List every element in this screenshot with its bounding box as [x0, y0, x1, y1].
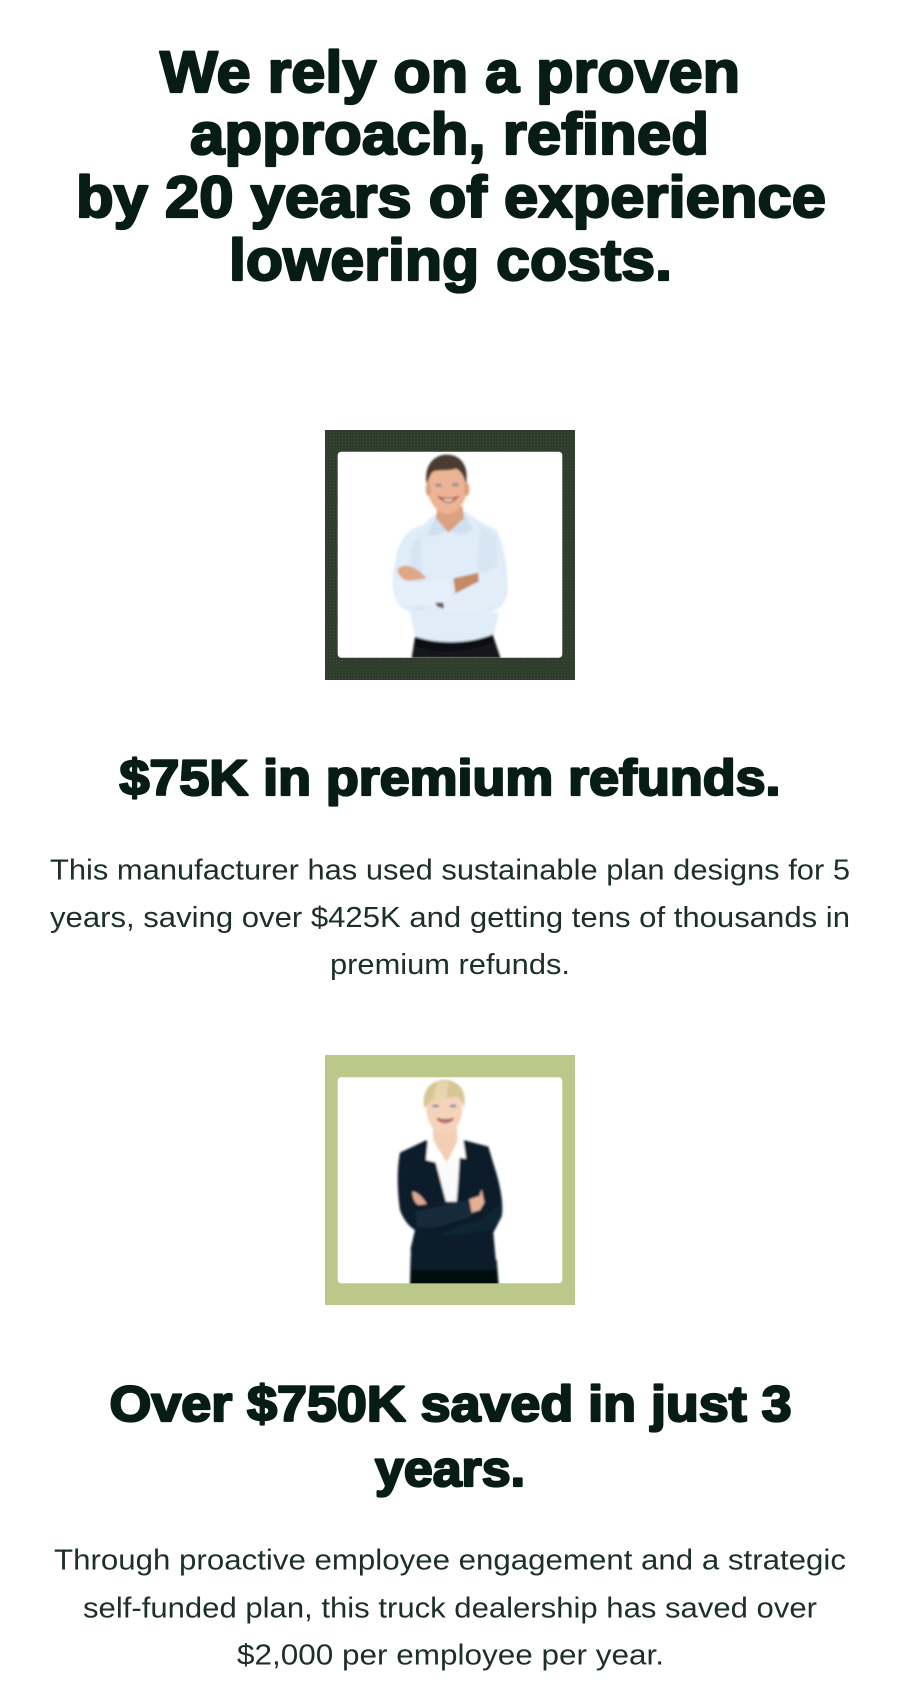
heading: Over $750K saved in just 3 years: years.: [375, 1441, 525, 1497]
heading: $75K in premium refunds: $75K in premium refunds.: [120, 750, 780, 806]
title: lowering costs.: [229, 228, 672, 293]
text block: truck dealership description: [54, 1544, 846, 1672]
text block: manufacturer description: years, saving over $425K and getting tens of thousands in: [50, 902, 850, 934]
title: We rely on a proven: [160, 40, 740, 105]
icon: man with crossed arms: [393, 455, 508, 658]
title: [76, 40, 826, 293]
heading: Over $750K saved in just 3 years: [110, 1376, 792, 1497]
title: by 20 years of experience: [76, 165, 826, 230]
text block: manufacturer description: [50, 854, 850, 981]
text block: truck dealership description: Through proactive employee engagement and a strategic: [54, 1544, 846, 1576]
text block: truck dealership description: self-funded plan, this truck dealership has saved over: [83, 1592, 817, 1624]
icon: woman with crossed arms: [398, 1080, 502, 1285]
text block: manufacturer description: This manufacturer has used sustainable plan designs for 5: [50, 854, 850, 886]
panel: man portrait: [325, 430, 575, 680]
title: approach, refined: [190, 102, 709, 167]
heading: Over $750K saved in just 3 years: Over $750K saved in just 3: [110, 1376, 792, 1432]
panel: woman portrait: [325, 1055, 575, 1305]
text block: truck dealership description: $2,000 per employee per year.: [237, 1640, 664, 1672]
text block: manufacturer description: premium refunds.: [330, 949, 570, 981]
